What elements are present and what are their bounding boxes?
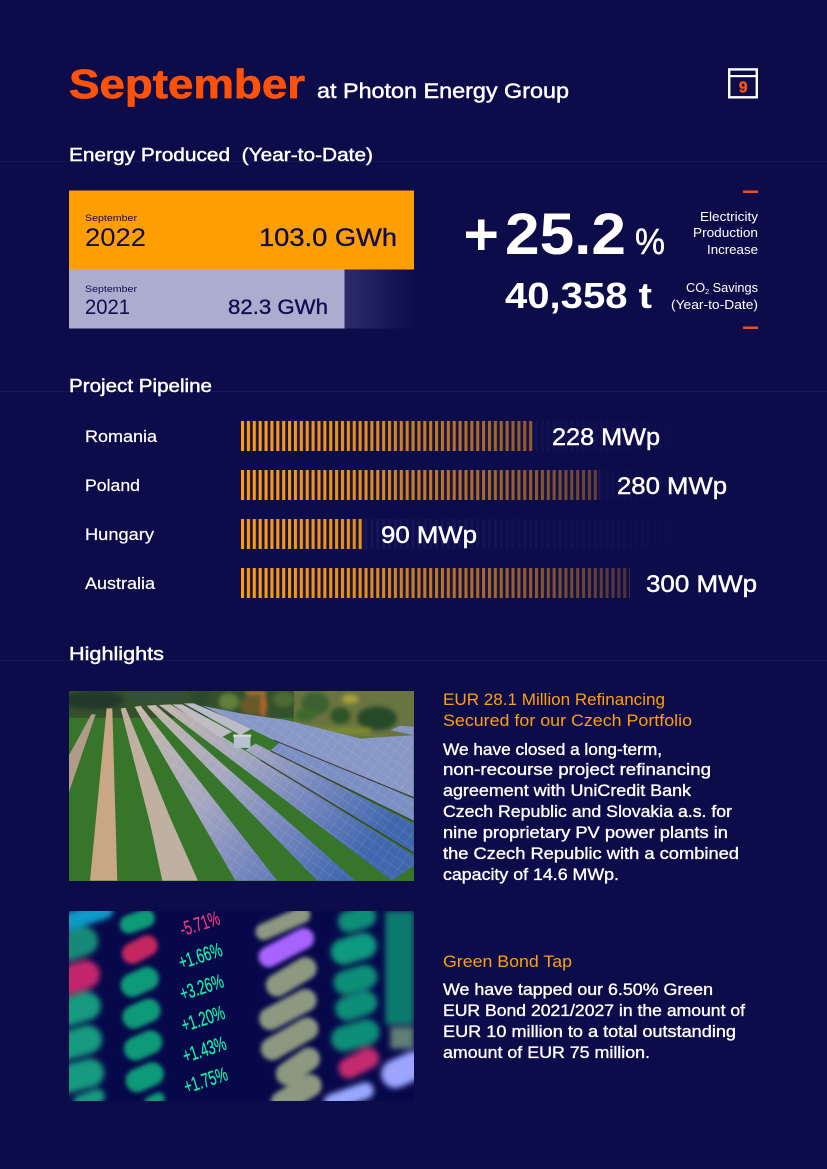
row: Australia bbox=[85, 568, 757, 598]
stat: production increase: Production bbox=[693, 226, 758, 240]
text block: green bond: Green Bond Tap bbox=[443, 953, 572, 971]
text block: refinancing: Secured for our Czech Portfolio bbox=[443, 712, 692, 730]
text block: green bond: amount of EUR 75 million. bbox=[443, 1044, 650, 1062]
text block: green bond: We have tapped our 6.50% Green bbox=[443, 981, 713, 999]
stat: production increase: Increase bbox=[707, 243, 758, 257]
text block: green bond: EUR Bond 2021/2027 in the amount of bbox=[443, 1002, 745, 1020]
text block: refinancing: capacity of 14.6 MWp. bbox=[443, 866, 619, 884]
panel: key figures bbox=[466, 190, 759, 329]
row: Poland: Poland bbox=[85, 476, 140, 495]
ticker percentages: +1.20% bbox=[179, 1002, 228, 1037]
title: September bbox=[69, 61, 305, 107]
text block: refinancing: non-recourse project refinancing bbox=[443, 761, 711, 779]
ticker percentages: +1.43% bbox=[180, 1033, 229, 1068]
chart: project pipeline bbox=[85, 421, 757, 598]
text block: green bond: EUR 10 million to a total outstanding bbox=[443, 1023, 736, 1041]
stat: production increase: Electricity bbox=[700, 210, 759, 224]
stat: production increase: % bbox=[635, 221, 665, 262]
image: solar farm bbox=[69, 691, 414, 881]
heading: highlights: Highlights bbox=[69, 643, 164, 664]
row: Poland: 280 MWp bbox=[617, 473, 727, 500]
text block: refinancing: agreement with UniCredit Bank bbox=[443, 782, 692, 800]
ticker percentages: +1.75% bbox=[181, 1064, 231, 1098]
panel: energy bars bbox=[69, 190, 414, 328]
blurred far columns bbox=[67, 910, 414, 1102]
text block: refinancing: Czech Republic and Slovakia a.s. for bbox=[443, 803, 733, 821]
heading: energy produced: Energy Produced (Year-to-Date) bbox=[69, 144, 373, 165]
text block: refinancing bbox=[443, 691, 739, 884]
bar: 2022: 103.0 GWh bbox=[259, 224, 397, 252]
text block: green bond bbox=[443, 953, 745, 1062]
ticker percentages: +3.26% bbox=[177, 971, 227, 1005]
title: at Photon Energy Group bbox=[317, 80, 569, 103]
stat: CO2 savings: 40,358 t bbox=[505, 275, 652, 316]
image: stock ticker board bbox=[69, 908, 414, 1101]
stat: CO2 savings: Savings bbox=[709, 281, 758, 295]
ticker percentages bbox=[176, 908, 231, 1098]
row: Romania: Romania bbox=[85, 427, 158, 446]
text block: refinancing: the Czech Republic with a combined bbox=[443, 845, 739, 863]
bar: 2022: 2022 bbox=[85, 224, 146, 252]
heading: project pipeline: Project Pipeline bbox=[69, 375, 212, 396]
ticker percentages: +1.66% bbox=[176, 939, 225, 974]
stat: production increase bbox=[466, 202, 759, 267]
text block: refinancing: We have closed a long-term, bbox=[443, 741, 662, 759]
icon: calendar: 9 bbox=[739, 80, 748, 96]
row: Romania: 228 MWp bbox=[552, 424, 660, 451]
row: Hungary: Hungary bbox=[85, 525, 155, 544]
row: Hungary: 90 MWp bbox=[381, 522, 477, 549]
bar: 2021: 2021 bbox=[85, 296, 130, 319]
bar: 2021: September bbox=[85, 284, 137, 295]
bar: 2022 bbox=[69, 190, 414, 270]
stat: CO2 savings bbox=[505, 275, 758, 316]
icon: calendar bbox=[729, 69, 757, 97]
stat: production increase: 25.2 bbox=[505, 202, 626, 267]
stat: CO2 savings: (Year-to-Date) bbox=[671, 298, 758, 312]
row: Poland bbox=[85, 470, 730, 500]
title bbox=[69, 61, 569, 107]
row: Australia: Australia bbox=[85, 574, 156, 593]
row: Romania bbox=[85, 421, 730, 451]
row: Australia: 300 MWp bbox=[646, 571, 757, 598]
bar: 2021: 82.3 GWh bbox=[228, 296, 328, 319]
bar: 2022: September bbox=[85, 213, 137, 224]
row: Hungary bbox=[85, 519, 730, 549]
stat: CO2 savings: CO bbox=[686, 281, 705, 295]
solar panel rows bbox=[69, 703, 414, 881]
text block: refinancing: nine proprietary PV power plants in bbox=[443, 824, 728, 842]
text block: refinancing: EUR 28.1 Million Refinancing bbox=[443, 691, 665, 709]
bar: 2021 bbox=[69, 270, 414, 328]
stat: CO2 savings: 2 bbox=[705, 289, 709, 296]
